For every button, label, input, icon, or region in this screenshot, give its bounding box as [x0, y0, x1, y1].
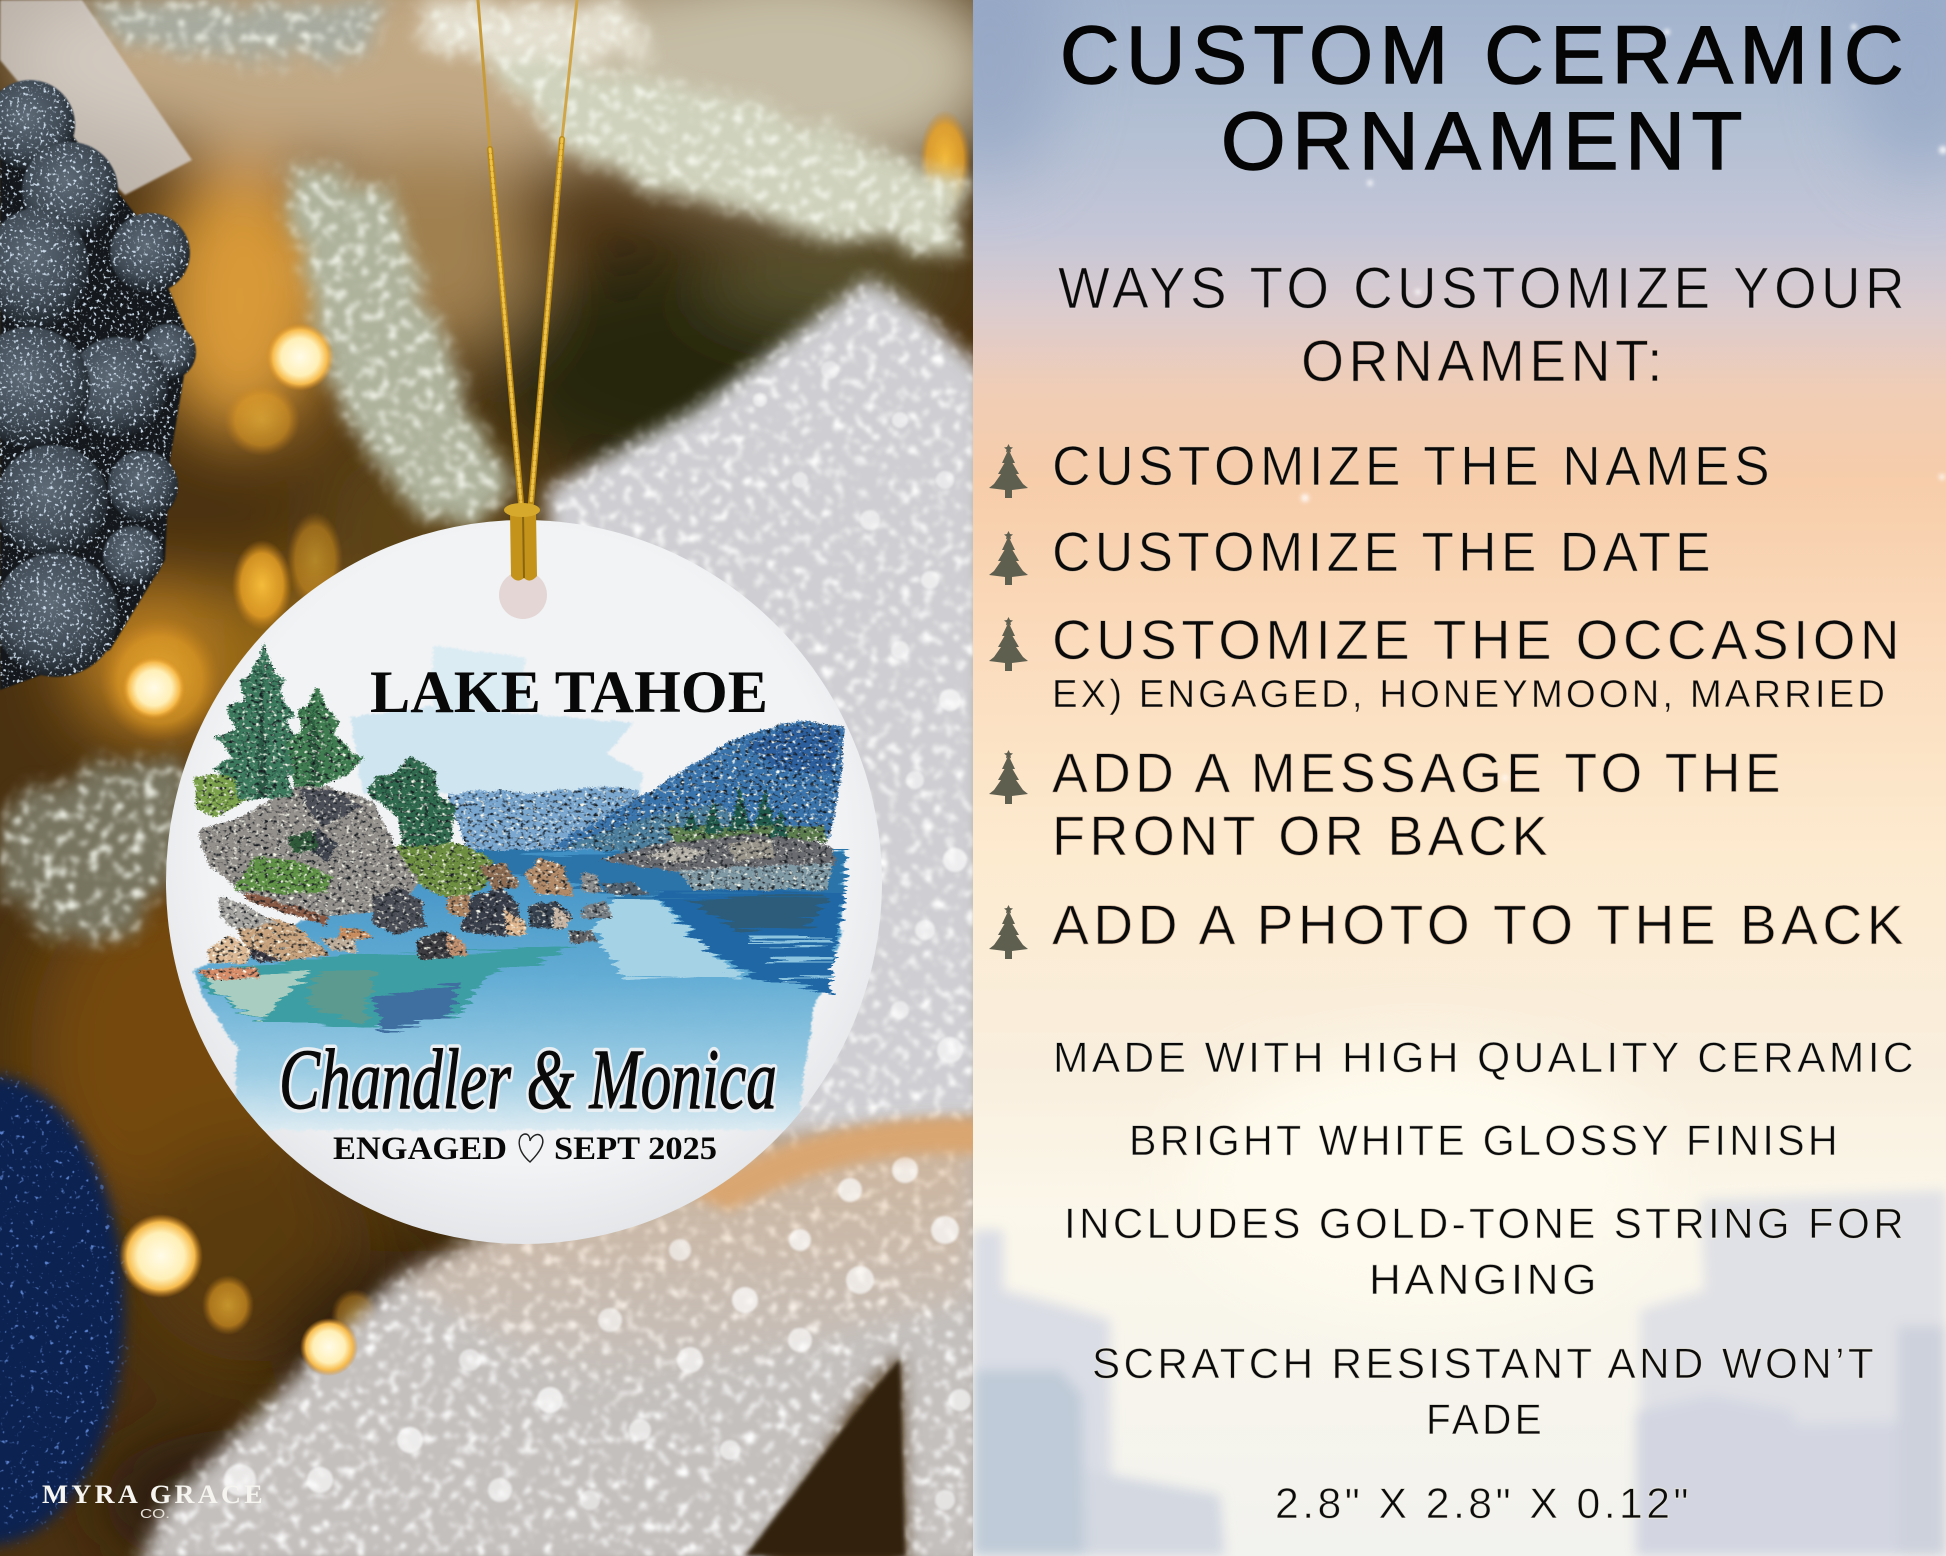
amber light glows: [100, 110, 971, 1341]
item: photo: ADD A PHOTO TO THE BACK: [1052, 893, 1908, 956]
island: [598, 827, 836, 872]
dark gap in ribbon: [745, 1358, 905, 1556]
icon: tree: [989, 531, 1028, 585]
subheading: WAYS TO CUSTOMIZE YOUR: [1058, 256, 1909, 321]
watermark: CO.: [140, 1506, 170, 1521]
item: occasion: CUSTOMIZE THE OCCASION: [1052, 608, 1904, 671]
icon: heart: [519, 1134, 543, 1162]
item: names: CUSTOMIZE THE NAMES: [1052, 434, 1774, 497]
item: message: ADD A MESSAGE TO THE: [1052, 741, 1785, 804]
distant mountains: [446, 787, 641, 850]
icon: tree: [989, 444, 1028, 498]
title: [1060, 10, 1910, 187]
faint sky above heading: [433, 647, 528, 710]
panel: product photo: [0, 0, 1010, 1556]
reflections in water: [199, 850, 845, 1033]
bokeh sparkles on ribbon: [224, 361, 971, 1510]
names in script: Chandler & Monica: [279, 1031, 777, 1127]
white glitter ribbon lower: [136, 1125, 985, 1556]
subheading: [1058, 256, 1909, 394]
glitter baubles: [0, 80, 196, 690]
right mountain: [550, 720, 845, 852]
item: occasion: [989, 608, 1904, 716]
gold string: [478, 0, 577, 503]
watermark: [42, 1480, 266, 1521]
white glitter ribbon upper: [546, 279, 985, 1145]
organza ribbon: [0, 0, 192, 195]
white snow specks: [1301, 24, 1946, 781]
boulders: [372, 887, 424, 935]
sky wash: [350, 707, 641, 793]
icon: tree: [989, 617, 1028, 671]
log: [244, 892, 329, 925]
mountains, rocks and trees: [194, 643, 845, 980]
string loop and knot: [504, 503, 540, 581]
names in script: Chandler & Monica: [279, 1031, 777, 1127]
feature: durability: FADE: [1426, 1396, 1545, 1444]
feature: string: INCLUDES GOLD-TONE STRING FOR: [1064, 1200, 1907, 1248]
ceramic ornament: [166, 503, 882, 1244]
watercolor city silhouette: [973, 1190, 1946, 1556]
date line: [333, 1131, 717, 1167]
item: date: CUSTOMIZE THE DATE: [1052, 520, 1715, 583]
frosted pine branches: [0, 0, 965, 942]
left cliff rock: [199, 787, 420, 917]
cream glow behind text: [1190, 1050, 1650, 1310]
feature: string: [1064, 1200, 1907, 1304]
title: ORNAMENT: [1221, 96, 1749, 187]
big pine: [212, 643, 307, 800]
date line: ENGAGED: [333, 1131, 507, 1167]
subheading: ORNAMENT:: [1301, 329, 1667, 394]
item: message: [989, 741, 1785, 867]
feature: durability: SCRATCH RESISTANT AND WON’T: [1092, 1340, 1877, 1388]
feature: dimensions: 2.8" X 2.8" X 0.12": [1275, 1480, 1692, 1528]
date line: SEPT 2025: [554, 1131, 717, 1167]
island trees: [682, 787, 791, 837]
second pine: [285, 687, 363, 787]
dark blue glitter bauble: [0, 1075, 125, 1545]
item: occasion: EX) ENGAGED, HONEYMOON, MARRIED: [1052, 673, 1888, 716]
icon: tree: [989, 750, 1028, 804]
watercolor mottling at top: [920, 0, 1946, 180]
product features: [1053, 1034, 1917, 1528]
blurred background colours: [10, 0, 1010, 1556]
lake water: [194, 847, 845, 1130]
feature: finish: BRIGHT WHITE GLOSSY FINISH: [1129, 1117, 1841, 1165]
panel: product details: [920, 0, 1946, 1556]
title: CUSTOM CERAMIC: [1060, 10, 1910, 101]
feature: durability: [1092, 1340, 1877, 1444]
lake tahoe watercolor scene: [194, 643, 845, 1130]
feature: ceramic: MADE WITH HIGH QUALITY CERAMIC: [1053, 1034, 1917, 1082]
feature: string: HANGING: [1369, 1256, 1600, 1304]
bokeh lights: [119, 323, 358, 1376]
heading: lake tahoe: LAKE TAHOE: [370, 659, 768, 725]
item: message: FRONT OR BACK: [1052, 804, 1552, 867]
watermark: MYRA GRACE: [42, 1480, 266, 1509]
list: customization options: [989, 434, 1908, 959]
peach tint on lower ribbon: [416, 1122, 973, 1356]
green bushes: [194, 773, 249, 817]
icon: tree: [989, 905, 1028, 959]
ornament hole: [499, 571, 547, 619]
peach edge of ribbon: [690, 1117, 985, 1210]
third pine: [368, 755, 455, 847]
